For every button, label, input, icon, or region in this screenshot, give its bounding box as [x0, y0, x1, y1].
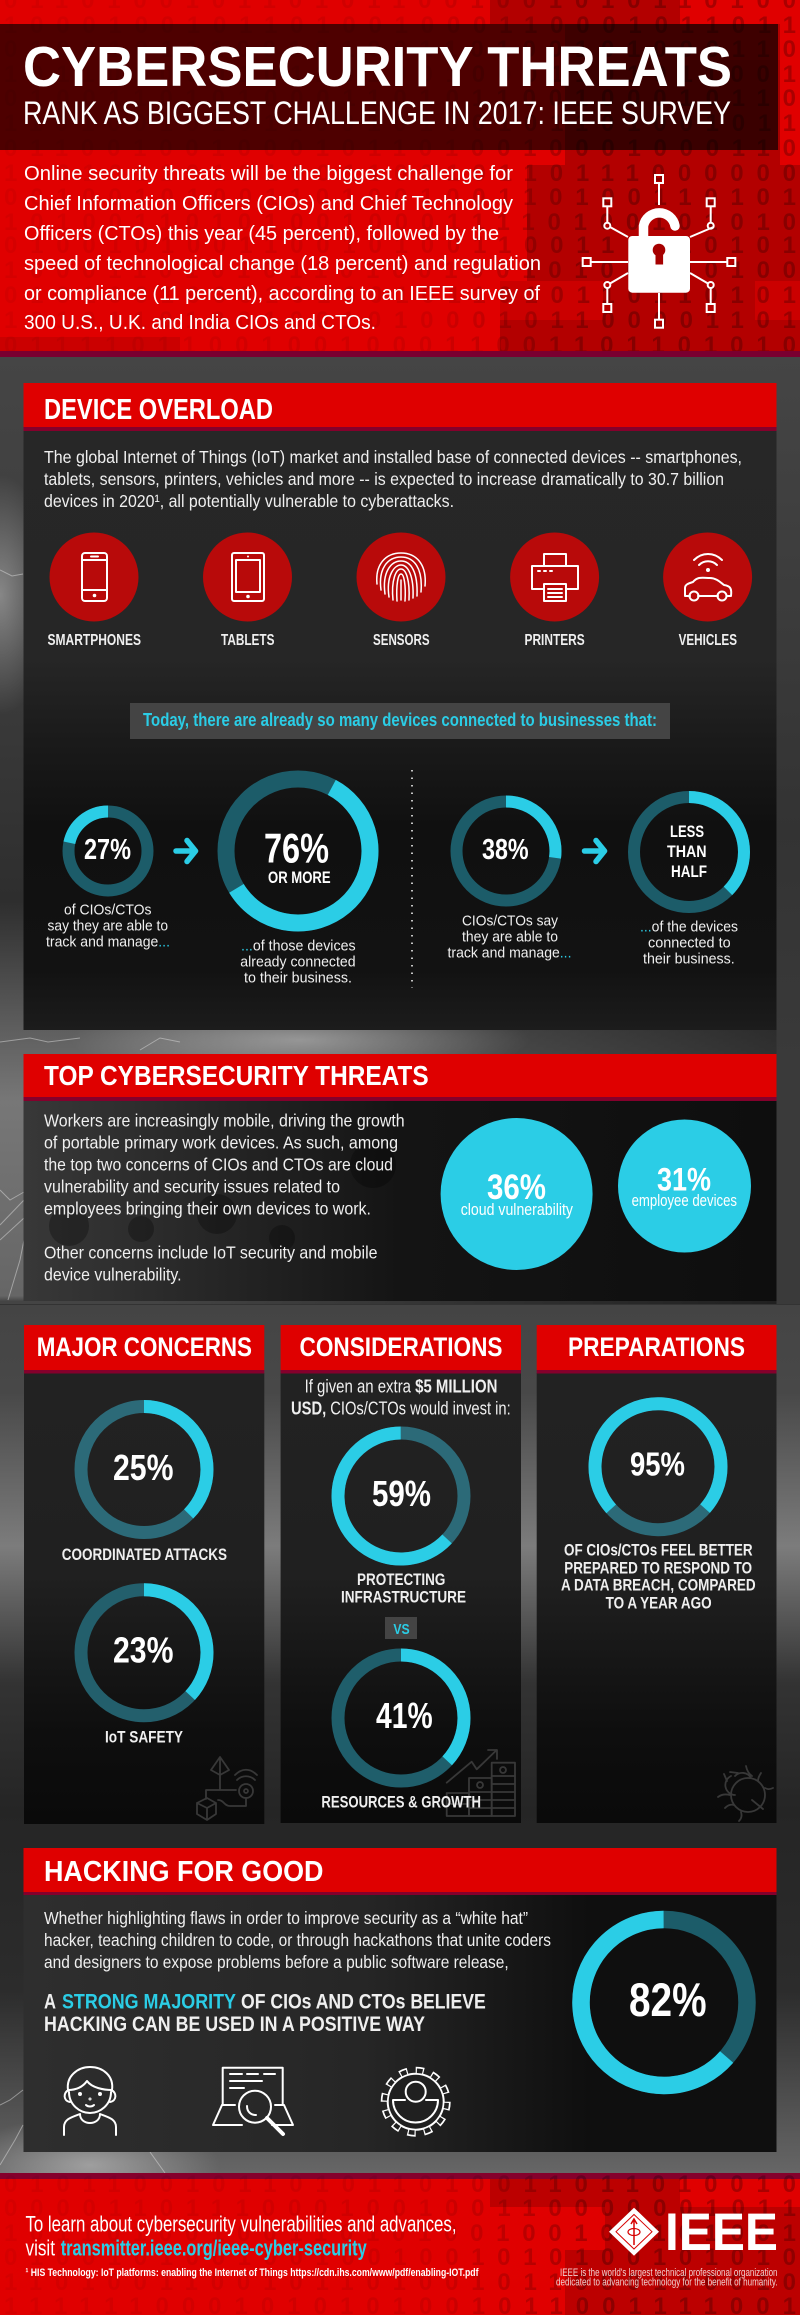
- badge: vs: VS: [393, 1621, 410, 1638]
- footer call to action: [26, 2212, 456, 2261]
- text: better prepared: [561, 1541, 756, 1612]
- heading: considerations: [281, 1325, 521, 1374]
- icon: tablet: [203, 532, 292, 622]
- hacking text: and designers to expose problems before a public software release,: [44, 1952, 509, 1972]
- header red banner: 0100110101000110101100100010110: [4, 85, 796, 112]
- chart: 41 percent ring: 41%: [376, 1695, 433, 1736]
- footer red banner: 0100101001001001001010100101010: [4, 2244, 796, 2271]
- statement: strong majority: A: [44, 1990, 56, 2013]
- chart: 38 percent ring: 38%: [482, 834, 529, 866]
- device labels: SMARTPHONES: [48, 632, 141, 649]
- text: CIOs/CTOs say: [448, 913, 572, 962]
- intro paragraph: Chief Information Officers (CIOs) and Chief Technology: [24, 192, 514, 215]
- chart: 41 percent ring: [338, 1655, 464, 1781]
- heading: hacking for good: HACKING FOR GOOD: [44, 1856, 324, 1888]
- footer call to action: transmitter.ieee.org/ieee-cyber-security: [61, 2236, 367, 2261]
- header red banner: 1000100101101001000110001011011: [4, 12, 796, 39]
- stat bubble: employee devices: employee devices: [632, 1191, 737, 1210]
- device labels: [48, 632, 737, 649]
- text: 5 million: If given an extra $5 MILLION: [305, 1377, 497, 1397]
- panel: device overload: [24, 383, 776, 1030]
- threats text: of portable primary work devices. As such, among: [44, 1133, 398, 1153]
- dotted divider: [411, 770, 413, 988]
- intro paragraph: or compliance (11 percent), according to an IEEE survey of: [24, 282, 540, 305]
- text: of the devices: [640, 919, 738, 968]
- header red banner: 1010110100100101000101100001101: [4, 307, 796, 334]
- text: of CIOs/CTOs say: [46, 902, 170, 951]
- header red banner: 0110010010001011010010001000110: [4, 135, 796, 162]
- stat bubble: cloud vulnerability: 36%: [487, 1168, 546, 1207]
- device overload text: [44, 447, 742, 511]
- threats text: employees bringing their own devices to work.: [44, 1199, 371, 1219]
- text: 5 million: USD, CIOs/CTOs would invest in:: [291, 1399, 511, 1419]
- chart: 25 percent ring: [81, 1406, 207, 1532]
- arrow: [584, 840, 604, 862]
- intro paragraph: Online security threats will be the biggest challenge for: [24, 162, 513, 185]
- threats text: Workers are increasingly mobile, driving the growth: [44, 1111, 405, 1131]
- intro paragraph: 300 U.S., U.K. and India CIOs and CTOs.: [24, 311, 376, 334]
- heading: major concerns: [24, 1325, 264, 1374]
- icon: connected car: [663, 532, 752, 622]
- chart: less than half ring: THAN: [667, 842, 707, 861]
- badge: vs: [385, 1617, 417, 1639]
- icon: fingerprint: [356, 532, 446, 622]
- chart: 25 percent ring: 25%: [113, 1447, 174, 1488]
- heading: preparations: PREPARATIONS: [568, 1332, 745, 1362]
- footnote: ¹ HIS Technology: IoT platforms: enabling the Internet of Things https://cdn.ihs.com/www/pdf/enabling-IOT.pdf: [26, 2267, 479, 2279]
- statement: strong majority: STRONG MAJORITY: [62, 1990, 236, 2013]
- panel: hacking for good: [24, 1848, 781, 2152]
- text: of CIOs/CTOs say: say they are able to: [48, 918, 168, 935]
- intro paragraph: [24, 162, 541, 334]
- device labels: PRINTERS: [524, 632, 585, 649]
- footer red banner: [0, 2171, 800, 2315]
- stat bubble: employee devices: [618, 1120, 751, 1252]
- statement: strong majority: [44, 1990, 486, 2036]
- callout: today: Today, there are already so many devices connected to businesses that:: [143, 709, 657, 730]
- heading: device overload: DEVICE OVERLOAD: [44, 394, 273, 426]
- footer red banner: 0101100101101011010011011010010: [4, 2171, 796, 2198]
- header red banner: 0010010100110100100110100110101: [4, 184, 796, 211]
- icon: padlock with circuit lines: [583, 175, 735, 328]
- chart: 76 percent ring: OR MORE: [268, 868, 331, 887]
- IEEE description: [556, 2267, 778, 2289]
- heading: device overload: [24, 383, 776, 431]
- chart: 59 percent ring: 59%: [372, 1473, 431, 1514]
- arrow: [176, 840, 196, 862]
- icon: faint growth chart: [447, 1750, 515, 1816]
- text: of those devices: already connected: [240, 954, 356, 971]
- icon: faint bug: [718, 1766, 773, 1821]
- threats text: [44, 1111, 405, 1285]
- chart: 38 percent ring: [456, 802, 556, 900]
- chart: 82 percent ring: 82%: [629, 1974, 707, 2027]
- chart: 95 percent ring: [569, 1378, 747, 1556]
- chart: less than half ring: [634, 797, 744, 907]
- hacking text: hacker, teaching children to code, or through hackathons that unite coders: [44, 1930, 551, 1950]
- label: iot safety: IoT SAFETY: [105, 1728, 184, 1747]
- statement: strong majority: OF CIOs AND CTOs BELIEVE: [241, 1990, 486, 2013]
- chart: 82 percent ring: [547, 1885, 781, 2120]
- icon: printer: [510, 532, 599, 622]
- panel: considerations: [281, 1325, 521, 1823]
- heading: major concerns: MAJOR CONCERNS: [37, 1332, 252, 1362]
- text: of those devices: to their business.: [244, 970, 352, 987]
- header red banner: 1001011010100110010110111000000: [4, 160, 796, 187]
- heading: hacking for good: [24, 1848, 776, 1895]
- label: protecting infrastructure: PROTECTING: [357, 1570, 445, 1589]
- statement: strong majority: HACKING CAN BE USED IN A POSITIVE WAY: [44, 2013, 425, 2036]
- device labels: TABLETS: [221, 632, 275, 649]
- icon: code search: [213, 2068, 293, 2134]
- panel: preparations: [537, 1325, 776, 1823]
- chart: less than half ring: LESS: [670, 822, 704, 841]
- text: of those devices: [240, 938, 356, 987]
- text: better prepared: TO A YEAR AGO: [606, 1593, 712, 1612]
- chart: 95 percent ring: 95%: [630, 1446, 685, 1483]
- header red banner: 1101001010110010100101101001011: [4, 110, 796, 137]
- text: of the devices: ...of the devices: [640, 919, 738, 936]
- main title: CYBERSECURITY THREATS: [23, 35, 732, 99]
- device overload text: tablets, sensors, printers, vehicles and more -- is expected to increase dramatically to 30.7 billion: [44, 469, 724, 489]
- text: of CIOs/CTOs say: track and manage...: [46, 934, 170, 951]
- header red banner: 0100101001100101001100110110101: [4, 232, 796, 259]
- icon: smartphone: [50, 532, 138, 622]
- header red banner: 1011010001011010010001101011001: [4, 61, 796, 88]
- chart: 76 percent ring: [201, 754, 395, 948]
- icon: child: [64, 2067, 116, 2135]
- label: resources and growth: RESOURCES & GROWTH: [321, 1792, 481, 1811]
- label: coordinated attacks: COORDINATED ATTACKS: [62, 1545, 227, 1564]
- panel: major concerns: [24, 1325, 264, 1824]
- chart: 59 percent ring: [312, 1407, 490, 1585]
- header red banner: 0111101100100100011001101101010: [4, 332, 796, 359]
- callout: today: [130, 703, 670, 739]
- icon: faint iot network: [197, 1757, 257, 1820]
- header red banner: 0101001000101001011010110110101: [4, 282, 796, 309]
- text: CIOs/CTOs say: track and manage...: [448, 945, 572, 962]
- header red banner: 1000110101011010010010100100100: [4, 257, 796, 284]
- label: protecting infrastructure: [341, 1570, 466, 1607]
- footer call to action: To learn about cybersecurity vulnerabilities and advances,: [26, 2212, 456, 2237]
- header red banner: [0, 0, 800, 359]
- text: of the devices: their business.: [643, 951, 735, 968]
- heading: preparations: [537, 1325, 776, 1374]
- chart: 23 percent ring: 23%: [113, 1630, 174, 1671]
- stat bubble: cloud vulnerability: [441, 1118, 593, 1270]
- intro paragraph: Officers (CTOs) this year (45 percent), followed by the: [24, 222, 499, 245]
- text: better prepared: OF CIOs/CTOs FEEL BETTER: [564, 1541, 753, 1560]
- threats text: vulnerability and security issues related to: [44, 1177, 340, 1197]
- footer red banner: 1011010010011010100100100101001: [4, 2220, 796, 2247]
- text: CIOs/CTOs say: CIOs/CTOs say: [462, 913, 558, 930]
- stat bubble: cloud vulnerability: cloud vulnerability: [461, 1200, 573, 1219]
- heading: top threats: [24, 1054, 776, 1101]
- device labels: VEHICLES: [679, 632, 737, 649]
- logo: IEEE: [609, 2203, 778, 2262]
- header red banner: 0100101110010100110100101000110: [4, 36, 796, 63]
- logo: IEEE: IEEE: [665, 2203, 778, 2262]
- title band: [0, 24, 778, 150]
- chart: 27 percent ring: [61, 804, 155, 898]
- device labels: SENSORS: [373, 632, 430, 649]
- footer call to action: visit: [26, 2236, 55, 2261]
- text: of the devices: connected to: [648, 935, 731, 952]
- stat bubble: employee devices: 31%: [657, 1162, 711, 1198]
- threats text: device vulnerability.: [44, 1265, 182, 1285]
- threats text: the top two concerns of CIOs and CTOs are cloud: [44, 1155, 393, 1175]
- text: 5 million: [291, 1377, 511, 1419]
- device overload text: The global Internet of Things (IoT) market and installed base of connected devices -- smartphones,: [44, 447, 742, 467]
- header red banner: 1010011010100100011110100101010: [4, 209, 796, 236]
- chart: less than half ring: HALF: [671, 862, 707, 881]
- hacking text: Whether highlighting flaws in order to improve security as a “white hat”: [44, 1908, 528, 1928]
- text: CIOs/CTOs say: they are able to: [462, 929, 558, 946]
- hacking text: [44, 1908, 551, 1972]
- text: better prepared: PREPARED TO RESPOND TO: [564, 1558, 752, 1577]
- device overload text: devices in 2020¹, all potentially vulnerable to cyberattacks.: [44, 491, 454, 511]
- label: protecting infrastructure: INFRASTRUCTURE: [341, 1588, 466, 1607]
- footer red banner: 0000110111000100100110000001011: [4, 2195, 796, 2222]
- text: of CIOs/CTOs say: of CIOs/CTOs: [64, 902, 152, 919]
- chart: 23 percent ring: [81, 1590, 207, 1716]
- footer red banner: 1101001100101101001011000110010: [4, 2269, 796, 2296]
- intro paragraph: speed of technological change (18 percent) and regulation: [24, 252, 541, 275]
- text: of those devices: ...of those devices: [241, 938, 356, 955]
- panel: top cybersecurity threats: [24, 1054, 776, 1301]
- heading: considerations: CONSIDERATIONS: [300, 1332, 502, 1362]
- icon: gear with person: [385, 2071, 447, 2133]
- text: better prepared: A DATA BREACH, COMPARED: [561, 1576, 756, 1595]
- heading: top threats: TOP CYBERSECURITY THREATS: [44, 1060, 429, 1091]
- chart: 76 percent ring: 76%: [264, 825, 329, 872]
- chart: 27 percent ring: 27%: [84, 834, 131, 866]
- threats text: Other concerns include IoT security and mobile: [44, 1243, 378, 1263]
